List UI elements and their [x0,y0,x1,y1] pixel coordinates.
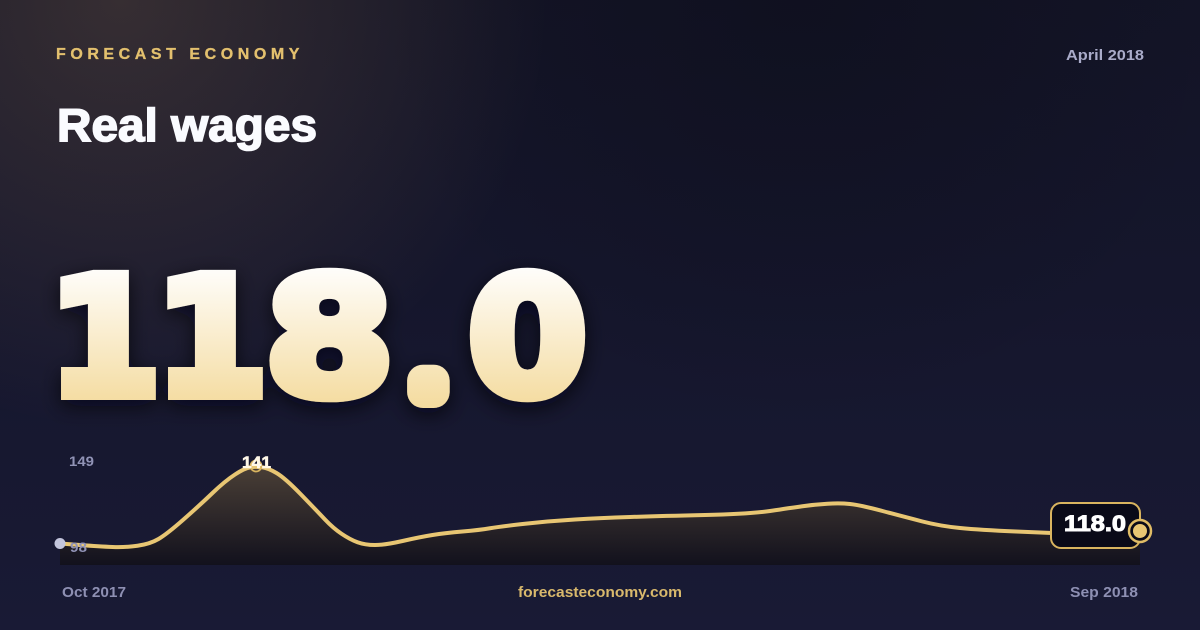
axis min label: 98 [70,539,87,555]
axis max label: 149 [69,453,94,469]
chart [54,453,1151,565]
end value badge [1051,503,1140,548]
big value: . [417,337,440,407]
brand eyebrow: FORECAST ECONOMY [56,46,304,63]
peak marker [250,460,262,472]
big value: 1 [155,245,268,433]
big value: 8 [265,245,394,433]
site url: forecasteconomy.com [518,584,682,601]
line [60,467,1052,547]
end date label: Sep 2018 [1070,584,1138,601]
peak label: 141 [242,453,271,472]
start dot [54,538,66,549]
end marker [1129,520,1151,542]
title: Real wages [57,99,317,151]
end value badge: 118.0 [1064,511,1126,536]
date: April 2018 [1066,47,1144,64]
big value: 1 [48,245,161,433]
area fill [60,467,1140,565]
start date label: Oct 2017 [62,584,126,601]
big value: 0 [468,245,587,433]
